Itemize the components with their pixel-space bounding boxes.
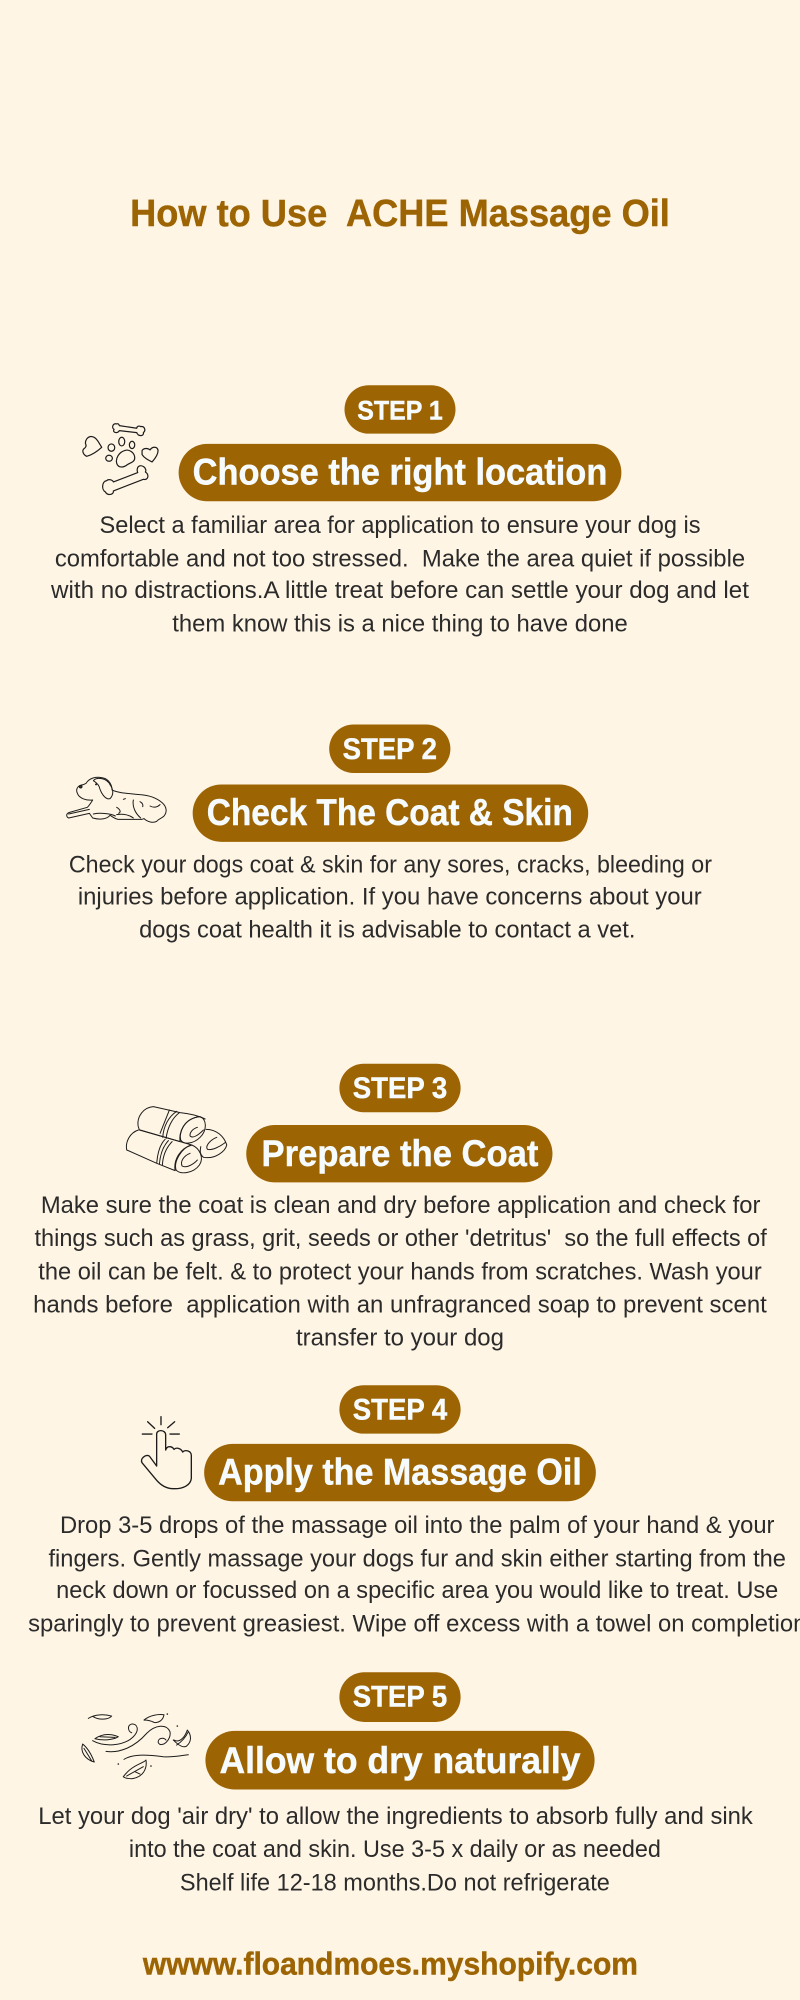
icon: tapping hand bbox=[142, 1417, 191, 1489]
step 3 badge bbox=[339, 1064, 461, 1112]
step 5 badge bbox=[339, 1672, 461, 1722]
step 3 body text: transfer to your dog bbox=[296, 1326, 504, 1352]
step 5 body text bbox=[38, 1804, 753, 1896]
step 4 heading bbox=[204, 1444, 596, 1501]
step 3 heading bbox=[246, 1125, 552, 1182]
step 5 heading: Allow to dry naturally bbox=[219, 1740, 581, 1781]
step 5 body text: into the coat and skin. Use 3-5 x daily or as needed bbox=[129, 1837, 661, 1863]
step 4 body text: sparingly to prevent greasiest. Wipe off excess with a towel on completion bbox=[28, 1611, 800, 1637]
title: How to Use ACHE Massage Oil bbox=[130, 192, 670, 235]
step 1 badge bbox=[344, 385, 456, 434]
step 5 body text: Let your dog 'air dry' to allow the ingredients to absorb fully and sink bbox=[38, 1804, 753, 1830]
icon: wind and leaves bbox=[82, 1714, 190, 1779]
footer website address: wwww.floandmoes.myshopify.com bbox=[142, 1945, 638, 1981]
panel: step 4 bbox=[28, 1385, 800, 1637]
step 2 body text: injuries before application. If you have concerns about your bbox=[78, 884, 702, 910]
step 4 body text bbox=[28, 1513, 800, 1637]
step 2 body text bbox=[69, 852, 712, 943]
step 2 heading bbox=[193, 784, 588, 842]
step 1 body text: Select a familiar area for application to ensure your dog is bbox=[100, 513, 700, 539]
panel: step 2 bbox=[67, 724, 712, 943]
step 2 body text: Check your dogs coat & skin for any sores, cracks, bleeding or bbox=[69, 852, 712, 878]
step 3 body text: the oil can be felt. & to protect your hands from scratches. Wash your bbox=[38, 1259, 762, 1285]
icon: lying dog bbox=[67, 777, 166, 822]
step 1 body text: comfortable and not too stressed. Make the area quiet if possible bbox=[55, 546, 745, 572]
step 4 heading: Apply the Massage Oil bbox=[218, 1452, 582, 1493]
step 1 body text: them know this is a nice thing to have done bbox=[172, 611, 628, 637]
step 3 body text: Make sure the coat is clean and dry before application and check for bbox=[41, 1193, 761, 1219]
step 4 body text: Drop 3-5 drops of the massage oil into the palm of your hand & your bbox=[60, 1513, 775, 1539]
step 4 badge bbox=[339, 1385, 461, 1434]
step 1 body text bbox=[50, 513, 749, 637]
step 5 badge: STEP 5 bbox=[353, 1681, 447, 1714]
step 1 heading bbox=[179, 444, 621, 501]
step 5 heading bbox=[205, 1731, 595, 1790]
step 5 body text: Shelf life 12-18 months.Do not refrigerate bbox=[180, 1870, 610, 1896]
step 1 badge: STEP 1 bbox=[357, 396, 443, 426]
step 2 heading: Check The Coat & Skin bbox=[207, 792, 573, 833]
panel: step 3 bbox=[33, 1064, 767, 1352]
icon: bones, paw and hearts bbox=[83, 424, 158, 494]
step 1 heading: Choose the right location bbox=[193, 452, 607, 493]
panel: step 1 bbox=[50, 385, 749, 637]
step 3 body text: hands before application with an unfragranced soap to prevent scent bbox=[33, 1293, 767, 1318]
step 3 heading: Prepare the Coat bbox=[262, 1133, 538, 1174]
step 4 body text: fingers. Gently massage your dogs fur and skin either starting from the bbox=[48, 1546, 786, 1572]
step 4 body text: neck down or focussed on a specific area you would like to treat. Use bbox=[56, 1578, 778, 1604]
step 1 body text: with no distractions.A little treat before can settle your dog and let bbox=[50, 578, 749, 604]
step 2 body text: dogs coat health it is advisable to contact a vet. bbox=[139, 918, 635, 943]
step 2 badge bbox=[329, 724, 450, 773]
panel: step 5 bbox=[38, 1672, 753, 1896]
step 2 badge: STEP 2 bbox=[343, 733, 437, 766]
step 3 badge: STEP 3 bbox=[353, 1072, 447, 1105]
step 3 body text bbox=[33, 1193, 767, 1352]
step 4 badge: STEP 4 bbox=[353, 1394, 448, 1427]
step 3 body text: things such as grass, grit, seeds or other 'detritus' so the full effects of bbox=[34, 1226, 767, 1252]
icon: rolled towels bbox=[126, 1107, 227, 1173]
